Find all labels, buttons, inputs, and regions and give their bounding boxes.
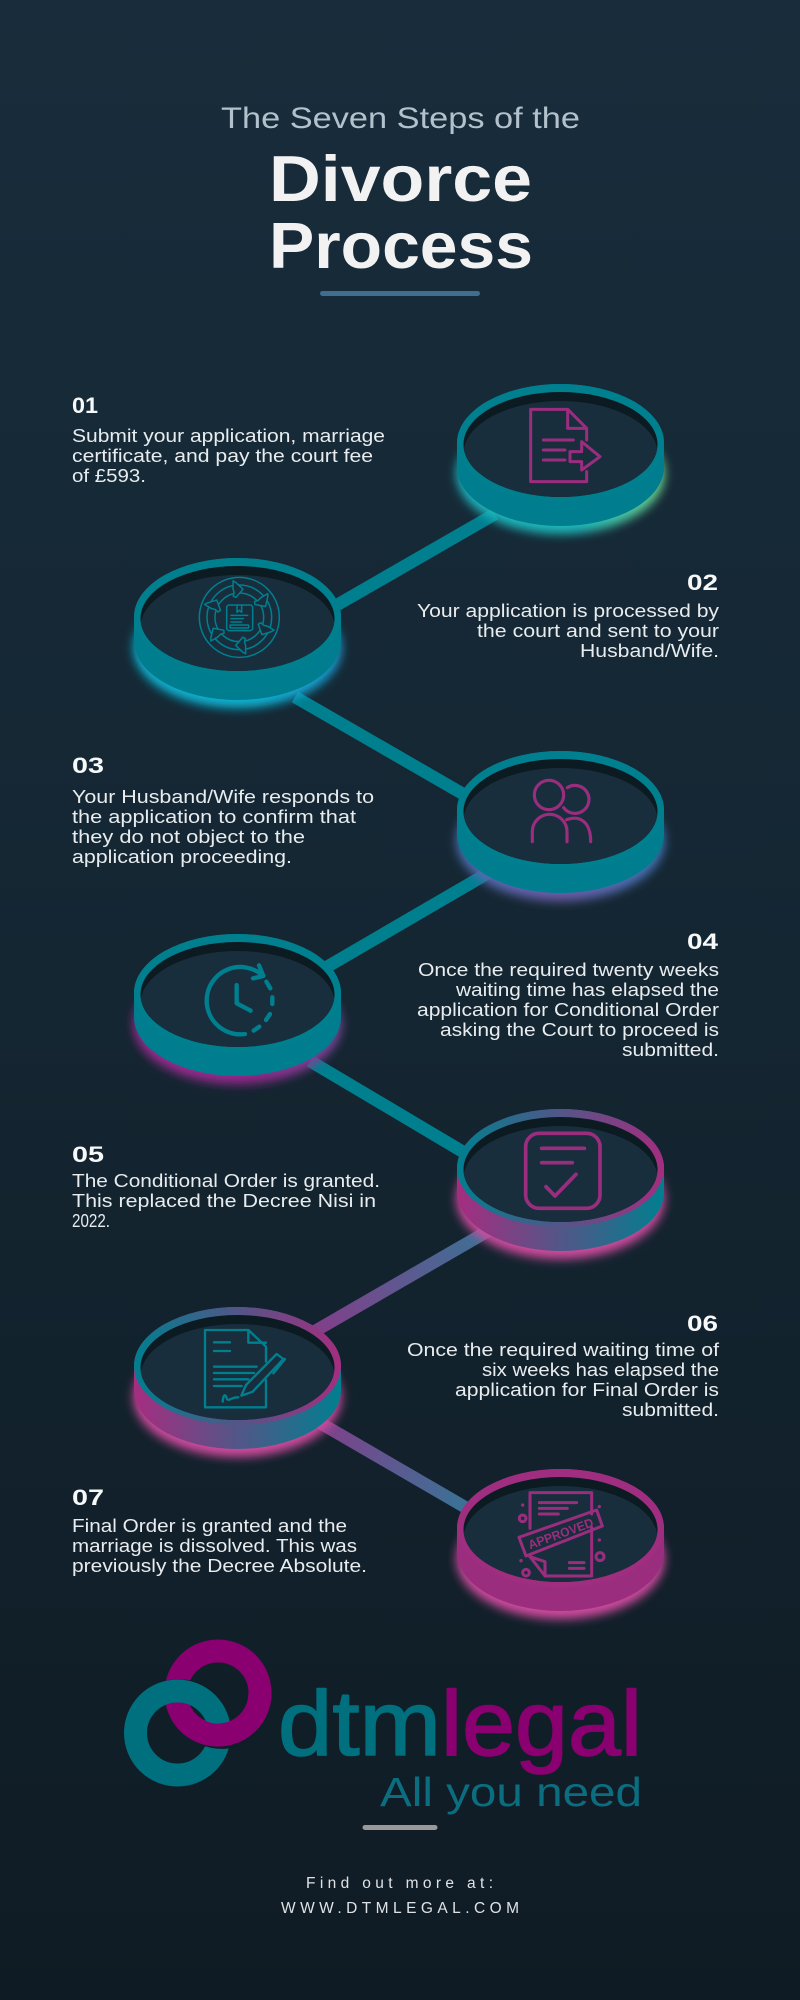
step 3 description: the application to confirm that [72, 806, 356, 827]
title block [221, 102, 580, 296]
step 5 text [72, 1142, 380, 1231]
connector 5 to 6 [310, 1227, 495, 1334]
step 1 text [72, 393, 385, 486]
step 4 description: waiting time has elapsed the [455, 979, 719, 1000]
step 5 description [72, 1170, 380, 1231]
step 2 disk [134, 558, 342, 708]
step 6 description: Once the required waiting time of [407, 1339, 720, 1360]
icon: clock with arrow [207, 965, 272, 1034]
heading: Process: Process [269, 209, 533, 282]
connector 4 to 5 [310, 1061, 470, 1156]
step 1 description: certificate, and pay the court fee [72, 445, 373, 466]
step 2 description: Husband/Wife. [580, 640, 719, 661]
step 6 description: submitted. [622, 1399, 719, 1420]
step 3 text [72, 753, 374, 867]
step 7 description [72, 1515, 367, 1576]
logo tagline: All you need [380, 1769, 642, 1815]
step 4 description: application for Conditional Order [417, 999, 719, 1020]
step 2 description: the court and sent to your [477, 620, 719, 641]
step 5 description: This replaced the Decree Nisi in [72, 1190, 376, 1211]
step 5 disk [456, 1109, 664, 1259]
step 6 description: application for Final Order is [455, 1379, 719, 1400]
footer [281, 1875, 519, 1917]
step 2 text [417, 570, 720, 661]
step 3 description: application proceeding. [72, 846, 292, 867]
step 6 description [407, 1339, 720, 1420]
logo mark: interlocked rings [133, 1651, 260, 1775]
website: WWW.DTMLEGAL.COM [281, 1900, 519, 1917]
icon: approved document: APPROVED [526, 1516, 595, 1552]
connector 2 to 3 [295, 697, 470, 798]
step 4 description [417, 959, 719, 1060]
step 7 description: marriage is dissolved. This was [72, 1535, 357, 1556]
subtitle: The Seven Steps of the [221, 102, 580, 135]
step 3 description: they do not object to the [72, 826, 305, 847]
title underline [320, 291, 480, 296]
icon: approved document [519, 1493, 604, 1576]
step number 04: 04 [687, 929, 719, 954]
step 3 description [72, 786, 374, 867]
step 4 description: Once the required twenty weeks [418, 959, 719, 980]
heading: Divorce: Divorce [269, 142, 532, 215]
logo [133, 1651, 642, 1815]
step 1 disk [456, 384, 664, 534]
icon: document with arrow [531, 409, 600, 482]
footer prompt: Find out more at: [306, 1875, 493, 1892]
step 7 description: Final Order is granted and the [72, 1515, 347, 1536]
step number 05: 05 [72, 1142, 104, 1167]
step 7 description: previously the Decree Absolute. [72, 1555, 367, 1576]
connector lines [295, 514, 495, 1510]
step 1 description: Submit your application, marriage [72, 425, 385, 446]
step 5 description: 2022. [72, 1210, 110, 1231]
step 1 description: of £593. [72, 465, 146, 486]
logo wordmark: dtm [278, 1673, 441, 1775]
connector 1 to 2 [330, 514, 495, 609]
icon: document with pen [205, 1330, 285, 1407]
step 4 description: asking the Court to proceed is [440, 1019, 719, 1040]
icon: checklist [526, 1133, 600, 1208]
step 3 description: Your Husband/Wife responds to [72, 786, 374, 807]
step 2 description: Your application is processed by [417, 600, 720, 621]
step 1 description [72, 425, 385, 486]
footer divider [362, 1825, 438, 1830]
connector 6 to 7 [315, 1420, 470, 1510]
step 4 disk [134, 934, 342, 1084]
step 7 disk [456, 1469, 664, 1619]
step number 01: 01 [72, 393, 98, 418]
step 4 text [417, 929, 719, 1060]
step 7 text [72, 1485, 367, 1576]
step 3 disk [456, 751, 664, 901]
icon: document in cycle arrows [199, 577, 279, 657]
step number 03: 03 [72, 753, 104, 778]
step number 02: 02 [687, 570, 718, 595]
step 6 text [407, 1311, 720, 1420]
icon: two people [532, 780, 591, 842]
step 5 description: The Conditional Order is granted. [72, 1170, 380, 1191]
step 6 disk [134, 1307, 342, 1457]
step 4 description: submitted. [622, 1039, 719, 1060]
connector 3 to 4 [325, 869, 495, 968]
logo wordmark: legal [441, 1673, 642, 1775]
step 6 description: six weeks has elapsed the [482, 1359, 719, 1380]
step number 07: 07 [72, 1485, 104, 1510]
logo wordmark [278, 1673, 642, 1775]
step number 06: 06 [687, 1311, 718, 1336]
step 2 description [417, 600, 720, 661]
